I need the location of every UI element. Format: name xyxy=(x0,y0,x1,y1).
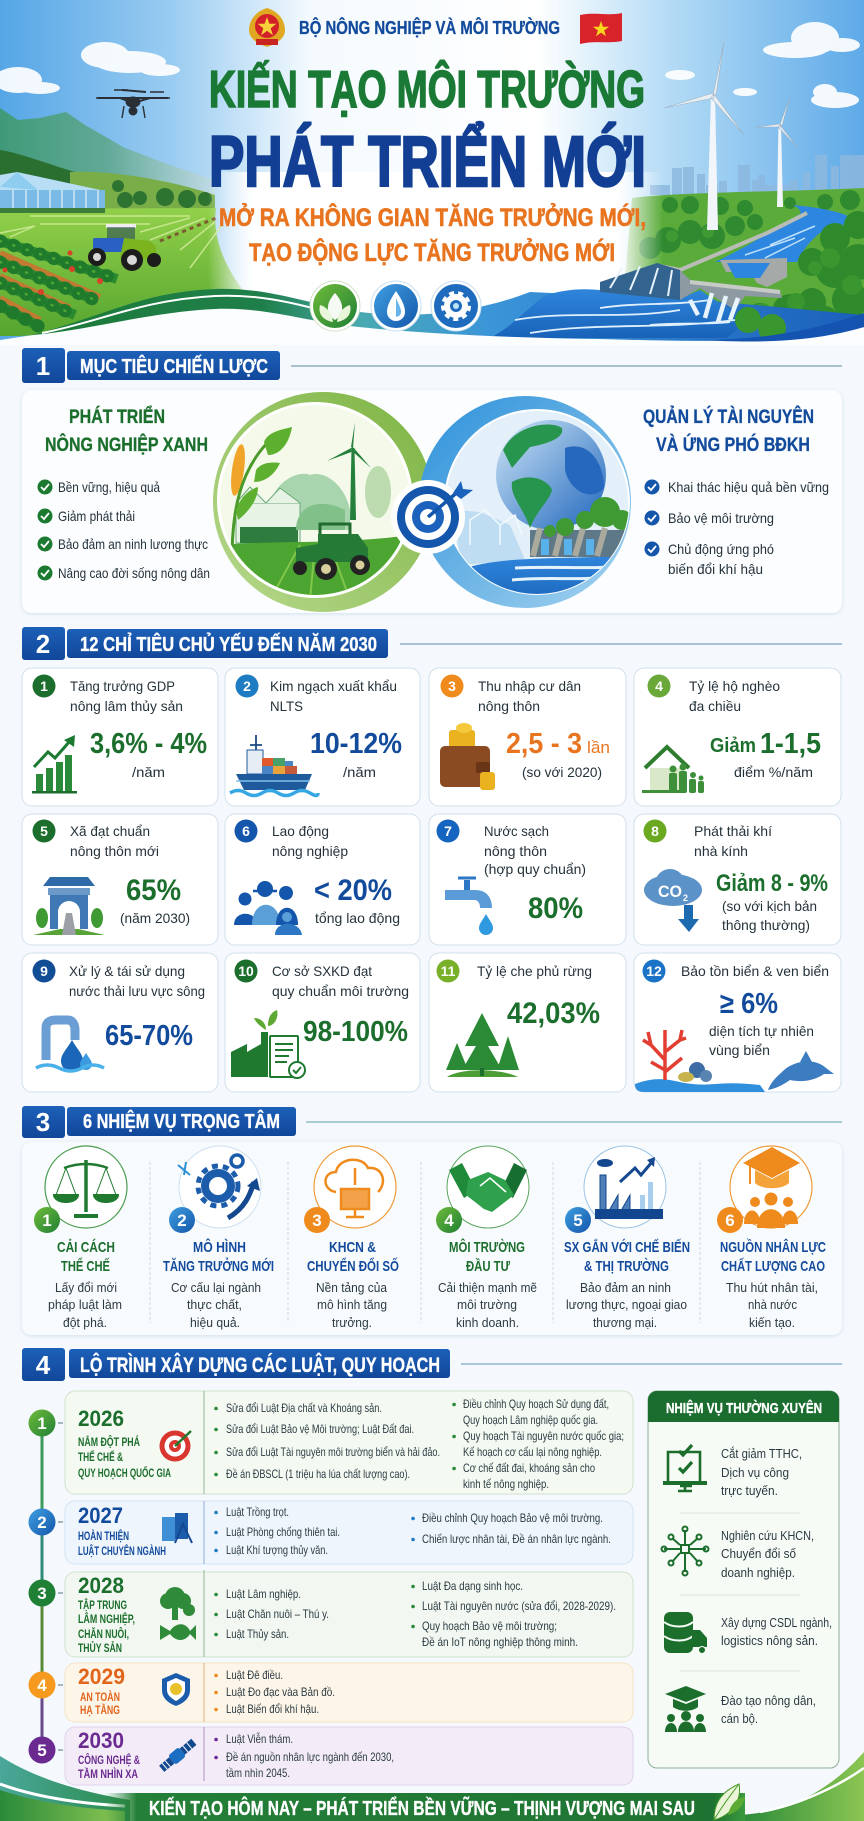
task 3: science, technology, digital: Nền tảng của xyxy=(316,1281,387,1295)
timeline 2026: 2026 xyxy=(78,1406,124,1431)
card 11: forest cover xyxy=(429,953,626,1092)
timeline 2026: NẮM ĐỘT PHÁ xyxy=(78,1434,140,1449)
panel: regular tasks xyxy=(648,1391,839,1768)
section 4 heading: 4 xyxy=(36,1350,51,1380)
card 2: exports: Kim ngạch xuất khẩu xyxy=(270,678,397,694)
field xyxy=(0,208,262,336)
task 5: production and market: lương thực, ngoại giao xyxy=(566,1298,687,1312)
section 1 heading xyxy=(22,348,842,383)
card 4: poverty rate: Tỷ lệ hộ nghèo xyxy=(689,678,780,694)
timeline 2029: 4 xyxy=(37,1676,47,1695)
card 8: greenhouse emissions xyxy=(634,814,841,945)
task 3: science, technology, digital: CHUYỂN ĐỔI SỐ xyxy=(307,1257,399,1275)
task 4: investment environment: 4 xyxy=(444,1211,454,1230)
panel: strategic goals xyxy=(22,390,842,613)
list: 2027 laws: Chiến lược nhân tài, Đề án nhân lực ngành. xyxy=(422,1532,611,1546)
icon: green factory and checklist xyxy=(231,1010,305,1078)
task 1: institutional reform: đột phá. xyxy=(63,1316,107,1330)
task 2: growth model: Cơ cấu lại ngành xyxy=(171,1281,261,1295)
section 1 heading: MỤC TIÊU CHIẾN LƯỢC xyxy=(80,354,268,378)
list: 2026 laws: Sửa đổi Luật Bảo vệ Môi trường; Luật Đất đai. xyxy=(226,1422,414,1436)
task 4: investment environment xyxy=(436,1146,537,1330)
list: 2026 laws: Điều chỉnh Quy hoạch Sử dụng đất, xyxy=(463,1397,609,1411)
task 2: growth model: 2 xyxy=(177,1211,187,1230)
card 2: exports xyxy=(225,668,420,806)
timeline 2028: TẬP TRUNG xyxy=(78,1597,127,1612)
footer swooshes xyxy=(0,1752,864,1821)
timeline 2028: LÂM NGHIỆP, xyxy=(78,1611,135,1626)
card 4: poverty rate: điểm %/năm xyxy=(734,764,813,780)
card 9: wastewater: 65-70% xyxy=(105,1020,193,1052)
timeline 2029: 2029 xyxy=(78,1664,125,1689)
task 1: institutional reform: Lấy đổi mới xyxy=(55,1281,117,1295)
blue swoosh xyxy=(700,313,864,341)
list: 2028 laws: Luật Thủy sản. xyxy=(226,1627,289,1641)
task 1: institutional reform: pháp luật làm xyxy=(48,1298,122,1312)
card 2: exports: /năm xyxy=(343,764,376,780)
card 11: forest cover: 42,03% xyxy=(507,997,600,1030)
list: green agriculture goals: Bền vững, hiệu quả xyxy=(58,479,160,495)
section 1 heading: 1 xyxy=(36,351,50,381)
white lower edge of banner xyxy=(0,309,864,345)
colored wave band xyxy=(28,289,864,345)
icon: book and compass xyxy=(162,1513,192,1543)
task 3: science, technology, digital: mô hình tăng xyxy=(317,1298,387,1312)
item: database and logistics: Xây dựng CSDL ngành, xyxy=(721,1616,832,1630)
timeline 2027: 2027 xyxy=(78,1503,123,1528)
heading: resources and climate: QUẢN LÝ TÀI NGUYÊN xyxy=(643,406,814,428)
timeline 2027: HOÀN THIỆN xyxy=(78,1528,129,1543)
list: 2027 laws xyxy=(216,1505,611,1557)
item: training: Đào tạo nông dân, xyxy=(721,1694,816,1708)
icon: dolphin xyxy=(768,1051,834,1090)
icon: flag xyxy=(580,13,622,44)
icon: CO2 cloud: 2 xyxy=(683,893,688,903)
greenhouse xyxy=(0,172,105,213)
card 10: compliant facilities: 98-100% xyxy=(303,1016,408,1048)
sky background xyxy=(0,0,864,345)
section 2 heading: 2 xyxy=(36,629,50,659)
card 5: new rural communes xyxy=(22,814,218,945)
list: 2028 laws: Luật Đa dạng sinh học. xyxy=(422,1579,523,1593)
card 3: rural income: nông thôn xyxy=(478,698,540,714)
card 9: wastewater: nước thải lưu vực sông xyxy=(69,983,205,999)
heading: green agriculture: PHÁT TRIỂN xyxy=(69,406,165,428)
section 3 heading xyxy=(22,1106,842,1138)
card 7: clean water: 7 xyxy=(444,823,452,839)
task 5: production and market: SX GẮN VỚI CHẾ BIẾN xyxy=(564,1238,690,1256)
icon: tree and fish xyxy=(160,1587,196,1640)
card 1: GDP growth: 3,6% - 4% xyxy=(90,728,207,760)
left landscape: mountain, fields, crops xyxy=(0,108,262,336)
list: 2028 laws: Đề án IoT nông nghiệp thông minh. xyxy=(422,1635,578,1649)
task 3: science, technology, digital xyxy=(304,1146,399,1330)
list: 2030 laws: Đề án nguồn nhân lực ngành đến 2030, xyxy=(226,1750,394,1764)
illustration: resources and climate circle xyxy=(419,396,640,610)
list: 2026 laws: Quy hoạch Lâm nghiệp quốc gia. xyxy=(463,1413,598,1427)
icon: wallet and coins xyxy=(440,723,495,790)
timeline 2027: 2 xyxy=(37,1513,47,1532)
task 5: production and market: 5 xyxy=(573,1211,583,1230)
list: 2026 laws: Sửa đổi Luật Tài nguyên môi trường biển và hải đảo. xyxy=(226,1445,440,1459)
task 5: production and market xyxy=(564,1146,690,1330)
card 4: poverty rate: 1-1,5 xyxy=(760,728,821,760)
card 5: new rural communes: 65% xyxy=(126,874,181,907)
icon: laptop checklist xyxy=(663,1445,707,1491)
list: 2028 laws: Quy hoạch Bảo vệ môi trường; xyxy=(422,1619,557,1633)
river xyxy=(715,205,852,262)
task 6: human resources: nhà nước xyxy=(748,1298,797,1312)
list: 2026 laws: Đề án ĐBSCL (1 triệu ha lúa chất lượng cao). xyxy=(226,1467,410,1481)
item: online public services: Dịch vụ công xyxy=(721,1466,789,1480)
task 6: human resources: CHẤT LƯỢNG CAO xyxy=(721,1258,825,1275)
item: database and logistics xyxy=(664,1612,832,1654)
card 8: greenhouse emissions: Phát thải khí xyxy=(694,823,772,839)
item: training: cán bộ. xyxy=(721,1712,758,1726)
icon: circuit xyxy=(662,1526,708,1576)
task 5: production and market: thương mại. xyxy=(593,1316,657,1330)
list: 2029 laws xyxy=(216,1668,335,1716)
task 3: science, technology, digital: 3 xyxy=(312,1211,322,1230)
icon: leaf badge xyxy=(310,281,360,331)
panel: regular tasks: NHIỆM VỤ THƯỜNG XUYÊN xyxy=(666,1399,822,1417)
icon: target with arrow xyxy=(391,480,473,554)
task 1: institutional reform: THỂ CHẾ xyxy=(61,1257,110,1275)
item: research and digital transformation: doanh nghiệp. xyxy=(721,1566,795,1580)
section 4 heading: LỘ TRÌNH XÂY DỰNG CÁC LUẬT, QUY HOẠCH xyxy=(80,1353,440,1377)
icon: graduation cap and people xyxy=(743,1147,800,1228)
list: 2028 laws: Luật Lâm nghiệp. xyxy=(226,1587,301,1601)
task 2: growth model: thực chất, xyxy=(187,1298,242,1312)
card 9: wastewater xyxy=(22,953,218,1092)
icon: graduation cap and group xyxy=(665,1686,706,1732)
task 6: human resources: Thu hút nhân tài, xyxy=(726,1281,818,1295)
card 6: agricultural labour: Lao động xyxy=(272,823,329,839)
icon: factory and chart xyxy=(595,1157,663,1219)
list: 2028 laws: Luật Chăn nuôi – Thú y. xyxy=(226,1607,329,1621)
icon: red target xyxy=(160,1430,191,1462)
list: 2027 laws: Điều chỉnh Quy hoạch Bảo vệ môi trường. xyxy=(422,1511,603,1525)
card 7: clean water: Nước sạch xyxy=(484,823,549,839)
card 3: rural income: (so với 2020) xyxy=(522,764,602,780)
card 10: compliant facilities: quy chuẩn môi trường xyxy=(272,983,409,999)
card 11: forest cover: 11 xyxy=(441,963,456,979)
list: 2030 laws xyxy=(216,1731,394,1780)
section 3 heading: 3 xyxy=(36,1107,50,1137)
icon: handshake xyxy=(449,1163,527,1212)
header banner xyxy=(0,0,864,345)
list: green agriculture goals: Bảo đảm an ninh lương thực xyxy=(58,536,208,552)
card 1: GDP growth: 1 xyxy=(40,678,48,694)
task 4: investment environment: kinh doanh. xyxy=(456,1316,519,1330)
panel: six key tasks xyxy=(22,1142,842,1335)
card 9: wastewater: 9 xyxy=(40,963,48,979)
icon: scales xyxy=(54,1160,118,1216)
icon: tractor xyxy=(88,224,161,271)
list: 2028 laws: Luật Tài nguyên nước (sửa đổi, 2028-2029). xyxy=(422,1599,616,1613)
card 7: clean water: 80% xyxy=(528,892,583,925)
card 6: agricultural labour: nông nghiệp xyxy=(272,843,348,859)
task 6: human resources: kiến tạo. xyxy=(749,1316,795,1330)
list: 2026 laws: Cơ chế đất đai, khoáng sản cho xyxy=(463,1461,595,1475)
footer banner xyxy=(105,1793,745,1821)
list: green agriculture goals: Giảm phát thải xyxy=(58,508,135,524)
section 4 heading xyxy=(22,1348,842,1381)
icon: growth chart xyxy=(32,735,77,794)
icon: gear badge xyxy=(431,281,481,331)
soil rows xyxy=(0,253,100,320)
card 10: compliant facilities xyxy=(225,953,420,1092)
timeline 2030: TẦM NHÌN XA xyxy=(78,1766,138,1781)
timeline 2028: 2028 xyxy=(78,1573,124,1598)
timeline 2026: THỂ CHẾ & xyxy=(78,1449,123,1464)
timeline 2030: CÔNG NGHỆ & xyxy=(78,1752,140,1767)
list: resources goals: Chủ động ứng phó xyxy=(668,541,774,557)
list: resources goals: Khai thác hiệu quả bền vững xyxy=(668,479,829,495)
task 5: production and market: Bảo đảm an ninh xyxy=(580,1281,671,1295)
ministry name: BỘ NÔNG NGHIỆP VÀ MÔI TRƯỜNG xyxy=(299,17,560,38)
card 6: agricultural labour: 6 xyxy=(242,823,250,839)
timeline 2028: THỦY SẢN xyxy=(78,1640,122,1655)
task 6: human resources: NGUỒN NHÂN LỰC xyxy=(720,1238,826,1256)
card 8: greenhouse emissions: 8 xyxy=(651,823,659,839)
heading: resources and climate xyxy=(643,406,814,456)
clouds xyxy=(0,22,860,108)
icon: wind turbines xyxy=(664,42,798,230)
card 7: clean water: (hợp quy chuẩn) xyxy=(484,861,586,877)
right landscape: skyline, turbines, river, dam, trees xyxy=(620,155,864,335)
timeline 2026 xyxy=(28,1391,633,1494)
section 2 heading xyxy=(22,627,842,660)
card 3: rural income: 2,5 - 3 xyxy=(506,728,582,760)
icon: database and truck xyxy=(664,1612,707,1654)
card 6: agricultural labour: tổng lao động xyxy=(315,910,400,926)
task 6: human resources: 6 xyxy=(725,1211,735,1230)
card 6: agricultural labour: < 20% xyxy=(314,874,392,907)
card 12: marine conservation: Bảo tồn biển & ven biển xyxy=(681,963,829,979)
card 4: poverty rate xyxy=(634,668,841,806)
card 10: compliant facilities: Cơ sở SXKD đạt xyxy=(272,963,372,979)
section 2 heading: 12 CHỈ TIÊU CHỦ YẾU ĐẾN NĂM 2030 xyxy=(80,632,377,656)
list: 2027 laws: Luật Phòng chống thiên tai. xyxy=(226,1525,340,1539)
card 1: GDP growth xyxy=(22,668,218,806)
timeline 2030: 5 xyxy=(37,1741,47,1760)
item: research and digital transformation xyxy=(662,1526,814,1580)
task 2: growth model xyxy=(163,1146,274,1330)
timeline 2029: AN TOÀN xyxy=(80,1689,120,1704)
timeline axis xyxy=(42,1423,63,1750)
timeline 2027 xyxy=(28,1501,633,1564)
task 6: human resources xyxy=(717,1146,826,1330)
card 12: marine conservation: vùng biển xyxy=(709,1042,770,1058)
crop rows xyxy=(0,241,117,328)
card 1: GDP growth: nông lâm thủy sản xyxy=(70,698,183,714)
card 2: exports: 2 xyxy=(243,678,251,694)
card 3: rural income: Thu nhập cư dân xyxy=(478,678,581,694)
icon: shield xyxy=(162,1673,190,1706)
icon: village gate xyxy=(33,877,105,935)
heading: green agriculture: NÔNG NGHIỆP XANH xyxy=(45,434,208,456)
icon: water drop badge xyxy=(371,281,421,331)
task 2: growth model: TĂNG TRƯỞNG MỚI xyxy=(163,1257,274,1275)
card 5: new rural communes: 5 xyxy=(40,823,48,839)
icon: forest xyxy=(446,1013,519,1077)
card 5: new rural communes: Xã đạt chuẩn xyxy=(70,823,150,839)
list: 2030 laws: Luật Viễn thám. xyxy=(226,1731,293,1746)
item: database and logistics: logistics nông sản. xyxy=(721,1634,818,1648)
timeline 2027: LUẬT CHUYÊN NGÀNH xyxy=(78,1543,166,1558)
icon: green tractor xyxy=(293,524,370,580)
card 3: rural income: 3 xyxy=(448,678,456,694)
central white fade behind title xyxy=(208,172,663,345)
dam and water xyxy=(490,258,787,342)
card 3: rural income: lần xyxy=(587,738,610,757)
task 1: institutional reform: 1 xyxy=(42,1211,52,1230)
icon: cargo ship xyxy=(230,735,318,796)
task 1: institutional reform: CẢI CÁCH xyxy=(57,1239,115,1256)
list: 2028 laws xyxy=(216,1579,616,1649)
list: 2027 laws: Luật Khí tượng thủy văn. xyxy=(226,1543,328,1557)
heading: resources and climate: VÀ ỨNG PHÓ BĐKH xyxy=(656,434,810,456)
item: research and digital transformation: Nghiên cứu KHCN, xyxy=(721,1529,814,1543)
task 2: growth model: MÔ HÌNH xyxy=(193,1238,246,1256)
title line 2: PHÁT TRIỂN MỚI xyxy=(209,122,646,202)
card 1: GDP growth: /năm xyxy=(132,764,165,780)
icon: pipe and water drops xyxy=(36,1020,104,1072)
timeline 2026: QUY HOẠCH QUỐC GIA xyxy=(78,1465,171,1480)
card 5: new rural communes: (năm 2030) xyxy=(120,910,190,926)
card 8: greenhouse emissions: (so với kịch bản xyxy=(722,898,817,914)
list: 2029 laws: Luật Biến đổi khí hậu. xyxy=(226,1702,319,1716)
subtitle xyxy=(219,202,646,267)
card 4: poverty rate: Giảm xyxy=(710,735,756,757)
task 4: investment environment: MÔI TRƯỜNG xyxy=(449,1238,525,1256)
icon: gears and growth arrow xyxy=(178,1155,260,1218)
task 5: production and market: & THỊ TRƯỜNG xyxy=(584,1257,669,1275)
list: 2030 laws: tầm nhìn 2045. xyxy=(226,1766,290,1780)
card 2: exports: 10-12% xyxy=(310,728,402,760)
item: online public services xyxy=(663,1445,802,1498)
heading: green agriculture xyxy=(45,406,208,456)
card 7: clean water: nông thôn xyxy=(484,843,547,859)
timeline 2028 xyxy=(28,1570,633,1657)
list: resources goals: biến đổi khí hậu xyxy=(668,561,763,577)
list: 2029 laws: Luật Đê điều. xyxy=(226,1668,283,1682)
list: 2026 laws: Kế hoạch cơ cấu lại nông nghiệp. xyxy=(463,1445,602,1459)
task 4: investment environment: ĐẦU TƯ xyxy=(466,1258,510,1275)
timeline 2028: CHĂN NUÔI, xyxy=(78,1626,129,1641)
task 4: investment environment: môi trường xyxy=(457,1298,517,1312)
task 4: investment environment: Cải thiện mạnh mẽ xyxy=(438,1281,537,1295)
icon: footer leaf xyxy=(714,1784,745,1820)
timeline 2026: 1 xyxy=(37,1414,47,1433)
list: green agriculture goals: Nâng cao đời sống nông dân xyxy=(58,565,210,581)
item: research and digital transformation: Chuyển đổi số xyxy=(721,1547,796,1561)
card 12: marine conservation: 12 xyxy=(646,963,662,979)
list: 2026 laws: Quy hoạch Tài nguyên nước quốc gia; xyxy=(463,1429,624,1443)
task 2: growth model: hiệu quả. xyxy=(190,1316,240,1330)
tree clusters xyxy=(745,211,864,334)
title line 1: KIẾN TẠO MÔI TRƯỜNG xyxy=(209,60,645,119)
list: 2026 laws xyxy=(216,1397,624,1491)
card 5: new rural communes: nông thôn mới xyxy=(70,843,159,859)
icon: satellite xyxy=(158,1737,198,1773)
card 8: greenhouse emissions: thông thường) xyxy=(722,917,810,933)
list: 2026 laws: kinh tế nông nghiệp. xyxy=(463,1477,549,1491)
icon: farmers xyxy=(234,881,302,935)
card 1: GDP growth: Tăng trưởng GDP xyxy=(70,678,175,694)
item: online public services: Cắt giảm TTHC, xyxy=(721,1446,802,1461)
icon: cloud and monitor xyxy=(326,1160,383,1217)
timeline 2028: 3 xyxy=(37,1584,47,1603)
item: training xyxy=(665,1686,816,1732)
list: 2029 laws: Luật Đo đạc vàa Bản đồ. xyxy=(226,1685,335,1699)
card 12: marine conservation: diện tích tự nhiên xyxy=(709,1023,814,1039)
card 8: greenhouse emissions: Giảm 8 - 9% xyxy=(716,870,828,897)
subtitle: MỞ RA KHÔNG GIAN TĂNG TRƯỞNG MỚI, xyxy=(219,202,646,232)
card 2: exports: NLTS xyxy=(270,698,303,714)
card 10: compliant facilities: 10 xyxy=(238,963,254,979)
list: green agriculture goals xyxy=(38,479,210,581)
item: online public services: trực tuyến. xyxy=(721,1484,778,1498)
timeline 2029: HẠ TẦNG xyxy=(80,1702,120,1717)
section 3 heading: 6 NHIỆM VỤ TRỌNG TÂM xyxy=(83,1109,280,1133)
footer banner: KIẾN TẠO HÔM NAY – PHÁT TRIỂN BỀN VỮNG – THỊNH VƯỢNG MAI SAU xyxy=(149,1796,695,1820)
list: resources goals: Bảo vệ môi trường xyxy=(668,510,774,526)
card 12: marine conservation xyxy=(634,953,841,1092)
icon: tap with drop xyxy=(445,878,493,935)
list: resources goals xyxy=(644,479,829,577)
card 4: poverty rate: 4 xyxy=(655,678,663,694)
card 8: greenhouse emissions: nhà kính xyxy=(694,843,748,859)
timeline 2030 xyxy=(28,1727,633,1785)
card 9: wastewater: Xử lý & tái sử dụng xyxy=(69,963,185,979)
icon: house and family xyxy=(642,747,704,793)
icon: drone xyxy=(96,90,170,118)
card 11: forest cover: Tỷ lệ che phủ rừng xyxy=(477,963,592,979)
card 4: poverty rate: đa chiều xyxy=(689,698,741,714)
card 6: agricultural labour xyxy=(225,814,420,945)
subtitle: TẠO ĐỘNG LỰC TĂNG TRƯỞNG MỚI xyxy=(249,237,615,267)
icon: CO2 cloud xyxy=(644,869,702,932)
icon: coral and rocks xyxy=(643,1030,712,1082)
timeline 2030: 2030 xyxy=(78,1728,124,1753)
illustration: green agriculture circle xyxy=(213,392,433,612)
list: 2026 laws: Sửa đổi Luật Địa chất và Khoáng sản. xyxy=(226,1401,382,1415)
list: 2027 laws: Luật Trồng trọt. xyxy=(226,1505,289,1519)
card 7: clean water xyxy=(429,814,626,945)
card 3: rural income xyxy=(429,668,626,806)
task 3: science, technology, digital: trưởng. xyxy=(332,1316,372,1330)
task 1: institutional reform xyxy=(34,1146,127,1330)
timeline 2029 xyxy=(28,1663,633,1722)
icon: CO2 cloud: CO xyxy=(658,882,682,901)
card 12: marine conservation: ≥ 6% xyxy=(720,988,778,1020)
task 3: science, technology, digital: KHCN & xyxy=(329,1239,376,1256)
ministry emblem xyxy=(249,8,285,47)
